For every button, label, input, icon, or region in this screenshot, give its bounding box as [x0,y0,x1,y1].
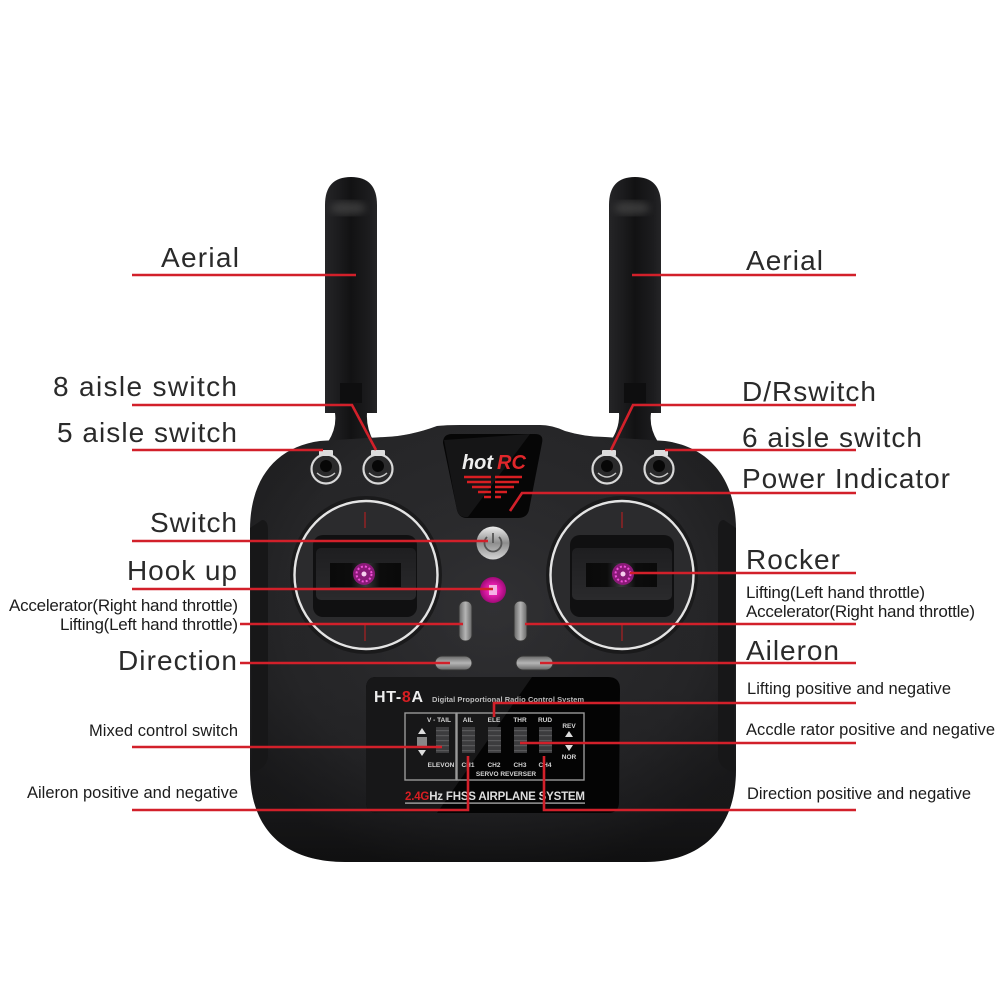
switch labels: AIL [463,717,473,724]
control label panel [366,677,620,813]
switch labels [427,717,577,778]
panel subtitle: Digital Proportional Radio Control System [432,695,584,704]
label: D/Rswitch: D/Rswitch [742,376,876,407]
label: Direction positive and negative: Direction positive and negative [747,785,971,803]
label: Aileron positive and negative: Aileron positive and negative [27,784,238,802]
switch labels: ELE [488,717,501,724]
label: right throttle text: Lifting(Left hand throttle) [746,583,925,602]
label: Aerial left: Aerial [161,242,239,273]
switch labels: NOR [562,754,577,761]
label: right throttle text: Accelerator(Right hand throttle) [746,602,975,621]
logo wings [464,477,522,497]
right stick knob [612,563,634,585]
icon: right aerial [609,177,661,442]
side grip left [250,520,268,772]
label: left throttle text [9,596,238,634]
label: Aileron: Aileron [746,635,839,666]
label: left throttle text: Accelerator(Right hand throttle) [9,596,238,615]
switch frames [405,713,584,780]
label: Hook up: Hook up [127,555,237,586]
hook up button [480,577,506,603]
switch labels: CH3 [513,762,527,769]
label: Switch: Switch [150,507,237,538]
logo panel [443,434,542,518]
transmitter body [250,425,736,862]
label: 5 aisle switch: 5 aisle switch [57,417,237,448]
right stick gimbal [546,496,698,654]
switch labels: ELEVON [428,762,455,769]
switch labels: CH2 [487,762,501,769]
system name: 2.4GHz FHSS AIRPLANE SYSTEM [405,791,585,803]
vertical trims [459,601,527,641]
dip switches [436,727,552,753]
power button [476,526,510,560]
switch labels: CH4 [538,762,552,769]
arrows [417,728,573,756]
left stick gimbal [290,496,442,654]
logo panel: RC [497,452,527,474]
left stick knob [353,563,375,585]
label: 8 aisle switch: 8 aisle switch [53,371,237,402]
label: 6 aisle switch: 6 aisle switch [742,422,922,453]
label: left throttle text: Lifting(Left hand throttle) [60,615,238,634]
switch labels: V - TAIL [427,717,451,724]
label: Aerial right: Aerial [746,245,823,276]
switch labels: SERVO REVERSER [476,771,536,778]
horizontal trims [435,656,553,670]
label: Power Indicator: Power Indicator [742,463,950,494]
callout lines [132,275,856,810]
icon: left aerial [325,177,377,442]
label: Accdle rator positive and negative: Accdle rator positive and negative [746,721,995,739]
toggle switches [312,450,674,484]
label: right throttle text [746,583,975,621]
switch labels: REV [562,723,576,730]
switch labels: THR [513,717,527,724]
model name: HT-8A [374,689,423,706]
label: Lifting positive and negative: Lifting positive and negative [747,680,951,698]
label: Direction: Direction [118,645,237,676]
switch labels: CH1 [461,762,475,769]
label: Rocker: Rocker [746,544,840,575]
switch labels: RUD [538,717,552,724]
label: Mixed control switch: Mixed control switch [89,722,238,740]
logo text: hot [462,452,494,474]
side grip right [718,520,736,772]
